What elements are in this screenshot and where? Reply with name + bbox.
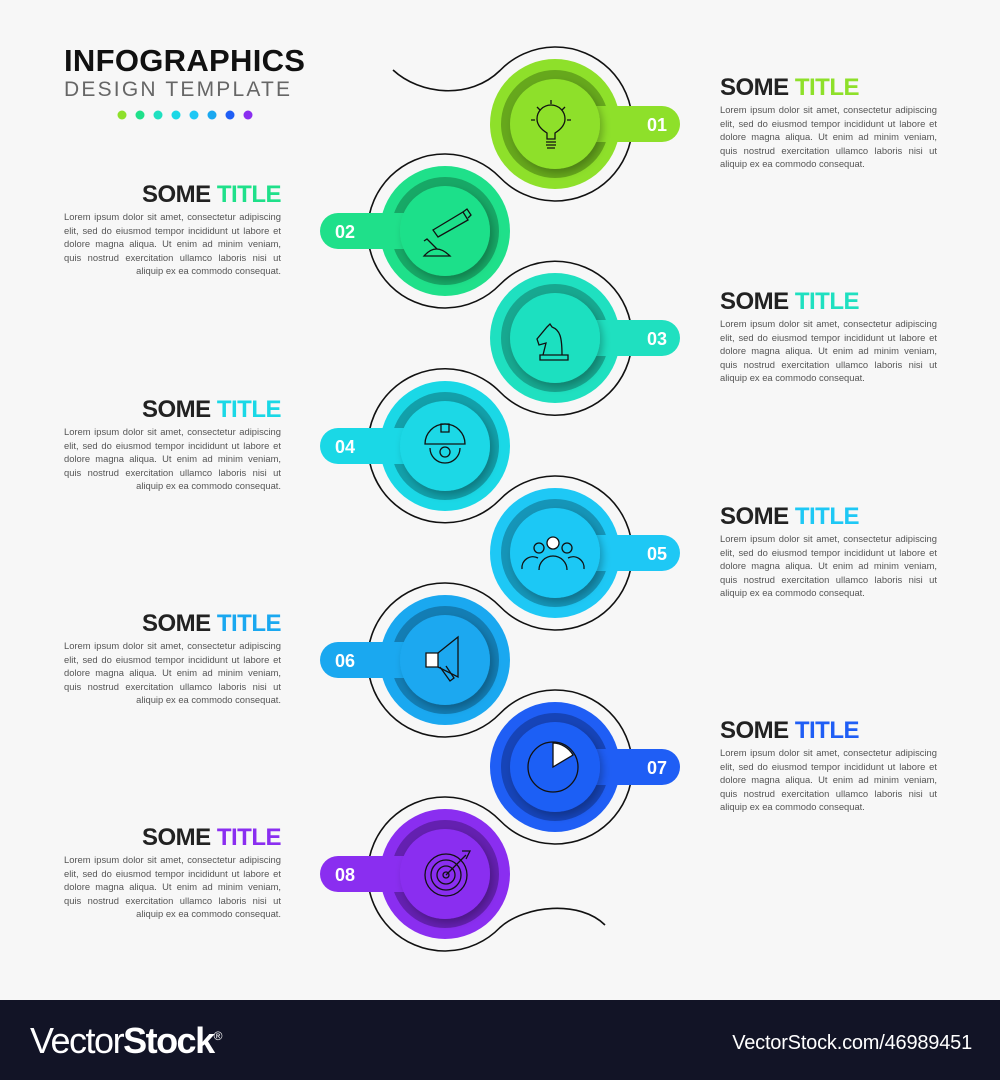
text block 8: SOME TITLE	[142, 824, 281, 851]
text block 3: SOME TITLE	[720, 288, 859, 315]
step 06	[320, 595, 510, 725]
text block 1: aliquip ex ea commodo consequat.	[720, 158, 865, 169]
text block 4: elit, sed do eiusmod tempor incididunt ut labore et	[64, 440, 281, 451]
text block 6: quis nostrud exercitation ullamco laboris nisi ut	[64, 681, 281, 692]
text block 1: quis nostrud exercitation ullamco laboris nisi ut	[720, 145, 937, 156]
text block 3: dolore magna aliqua. Ut enim ad minim veniam,	[720, 345, 937, 356]
step 02: 02	[335, 222, 355, 242]
step 04	[320, 381, 510, 511]
icon: bulb	[531, 100, 571, 148]
text block 4	[64, 396, 281, 491]
text block 5	[720, 503, 937, 598]
text block 8: dolore magna aliqua. Ut enim ad minim veniam,	[64, 881, 281, 892]
step 08: 08	[335, 865, 355, 885]
text block 5: aliquip ex ea commodo consequat.	[720, 587, 865, 598]
text block 2	[64, 181, 281, 276]
icon: timer	[528, 742, 578, 792]
text block 8	[64, 824, 281, 919]
footer bar: VectorStock.com/46989451	[732, 1032, 972, 1054]
icon: target	[425, 851, 470, 896]
step 08	[320, 809, 510, 939]
text block 8: Lorem ipsum dolor sit amet, consectetur adipiscing	[64, 854, 281, 865]
text block 5: quis nostrud exercitation ullamco laboris nisi ut	[720, 574, 937, 585]
step 01: 01	[647, 115, 667, 135]
text block 8: aliquip ex ea commodo consequat.	[136, 908, 281, 919]
text block 6	[64, 610, 281, 705]
step 06: 06	[335, 651, 355, 671]
color dots	[118, 110, 252, 120]
icon: team	[522, 537, 584, 570]
text block 1: dolore magna aliqua. Ut enim ad minim veniam,	[720, 131, 937, 142]
text block 2: SOME TITLE	[142, 181, 281, 208]
icon: helmet gear	[425, 424, 465, 463]
connector line	[368, 47, 632, 951]
text block 4: dolore magna aliqua. Ut enim ad minim veniam,	[64, 453, 281, 464]
text block 7: elit, sed do eiusmod tempor incididunt ut labore et	[720, 761, 937, 772]
text block 2: dolore magna aliqua. Ut enim ad minim veniam,	[64, 238, 281, 249]
step 07: 07	[647, 758, 667, 778]
text block 5: dolore magna aliqua. Ut enim ad minim veniam,	[720, 560, 937, 571]
step 05: 05	[647, 544, 667, 564]
text block 3	[720, 288, 937, 383]
text block 6: aliquip ex ea commodo consequat.	[136, 694, 281, 705]
text block 7: Lorem ipsum dolor sit amet, consectetur adipiscing	[720, 747, 937, 758]
text block 8: quis nostrud exercitation ullamco laboris nisi ut	[64, 895, 281, 906]
text block 4: aliquip ex ea commodo consequat.	[136, 480, 281, 491]
text block 7: aliquip ex ea commodo consequat.	[720, 801, 865, 812]
text block 3: Lorem ipsum dolor sit amet, consectetur adipiscing	[720, 318, 937, 329]
text block 7: quis nostrud exercitation ullamco laboris nisi ut	[720, 788, 937, 799]
icon: megaphone	[426, 637, 458, 681]
text block 7: dolore magna aliqua. Ut enim ad minim veniam,	[720, 774, 937, 785]
footer bar: VectorStock®	[30, 1020, 221, 1061]
step 04: 04	[335, 437, 355, 457]
text block 4: quis nostrud exercitation ullamco laboris nisi ut	[64, 467, 281, 478]
footer bar	[0, 1000, 1000, 1080]
step 02	[320, 166, 510, 296]
text block 3: quis nostrud exercitation ullamco laboris nisi ut	[720, 359, 937, 370]
text block 4: Lorem ipsum dolor sit amet, consectetur adipiscing	[64, 426, 281, 437]
text block 8: elit, sed do eiusmod tempor incididunt ut labore et	[64, 868, 281, 879]
text block 6: SOME TITLE	[142, 610, 281, 637]
text block 2: aliquip ex ea commodo consequat.	[136, 265, 281, 276]
text block 1	[720, 74, 937, 169]
text block 3: aliquip ex ea commodo consequat.	[720, 372, 865, 383]
text block 5: Lorem ipsum dolor sit amet, consectetur adipiscing	[720, 533, 937, 544]
icon: chess knight	[537, 324, 568, 360]
step 03	[490, 273, 680, 403]
text block 6: Lorem ipsum dolor sit amet, consectetur adipiscing	[64, 640, 281, 651]
text block 2: quis nostrud exercitation ullamco laboris nisi ut	[64, 252, 281, 263]
text block 1: SOME TITLE	[720, 74, 859, 101]
text block 2: elit, sed do eiusmod tempor incididunt ut labore et	[64, 225, 281, 236]
text block 6: dolore magna aliqua. Ut enim ad minim veniam,	[64, 667, 281, 678]
step 01	[490, 59, 680, 189]
text block 3: elit, sed do eiusmod tempor incididunt ut labore et	[720, 332, 937, 343]
header title	[64, 43, 305, 101]
text block 6: elit, sed do eiusmod tempor incididunt ut labore et	[64, 654, 281, 665]
header title: DESIGN TEMPLATE	[64, 78, 292, 101]
step 05	[490, 488, 680, 618]
text block 7: SOME TITLE	[720, 717, 859, 744]
icon: microscope	[424, 209, 471, 256]
step 07	[490, 702, 680, 832]
text block 4: SOME TITLE	[142, 396, 281, 423]
text block 2: Lorem ipsum dolor sit amet, consectetur adipiscing	[64, 211, 281, 222]
text block 1: Lorem ipsum dolor sit amet, consectetur adipiscing	[720, 104, 937, 115]
text block 7	[720, 717, 937, 812]
text block 1: elit, sed do eiusmod tempor incididunt ut labore et	[720, 118, 937, 129]
text block 5: SOME TITLE	[720, 503, 859, 530]
header title: INFOGRAPHICS	[64, 43, 305, 78]
text block 5: elit, sed do eiusmod tempor incididunt ut labore et	[720, 547, 937, 558]
step 03: 03	[647, 329, 667, 349]
